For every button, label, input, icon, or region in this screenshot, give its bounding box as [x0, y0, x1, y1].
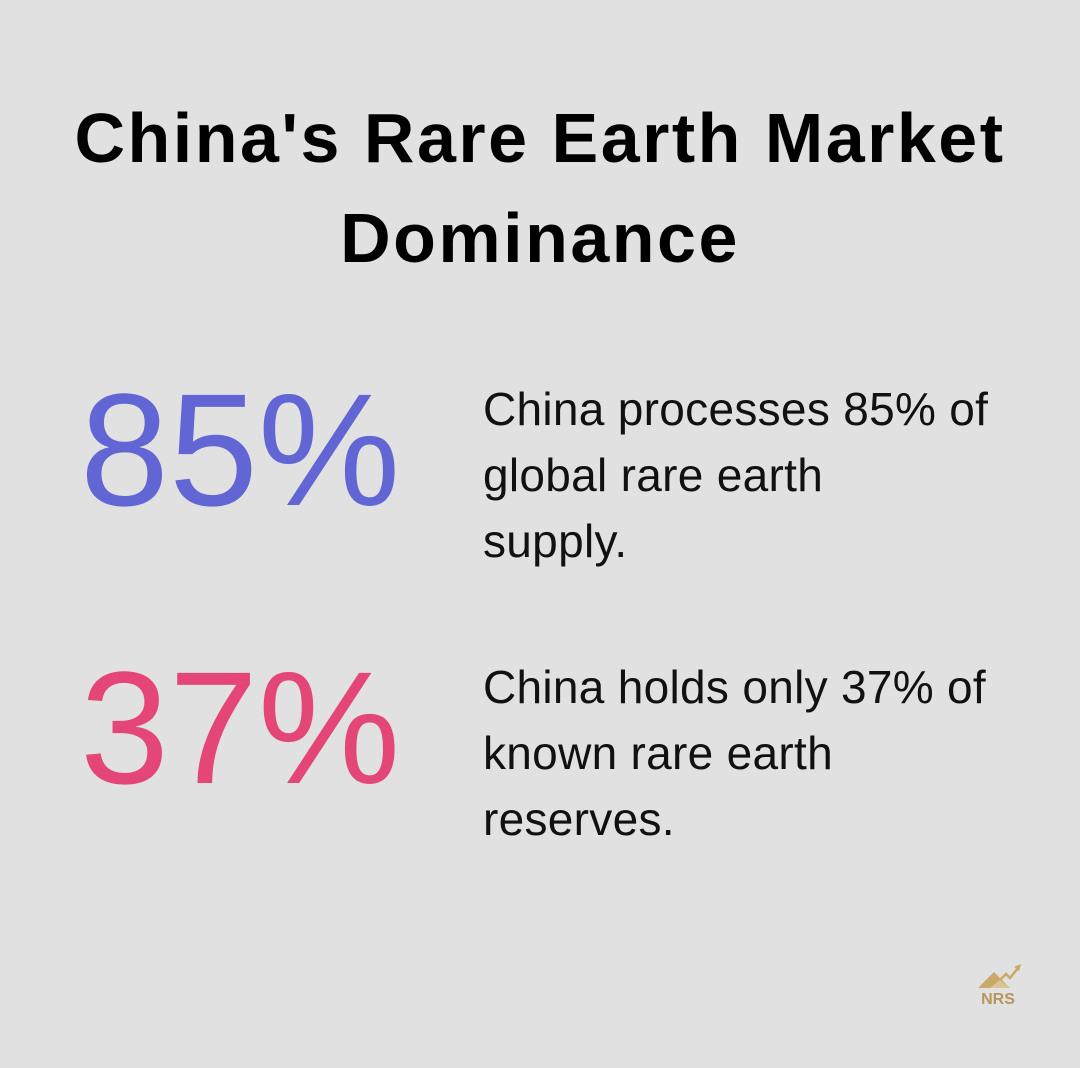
title	[74, 99, 1006, 277]
logo: NRS	[978, 964, 1021, 1006]
stat description: processing: supply.	[483, 515, 627, 567]
stat description: processing: China processes 85% of	[483, 383, 988, 435]
title: Dominance	[340, 199, 740, 277]
stat number: 37%: 37%	[80, 638, 400, 817]
title: China's Rare Earth Market	[74, 99, 1006, 177]
stat description: reserves: reserves.	[483, 793, 675, 845]
stat description: reserves: known rare earth	[483, 727, 833, 779]
stat number: 85%: 85%	[80, 360, 400, 539]
stat description: processing	[483, 383, 988, 567]
stat description: processing: global rare earth	[483, 449, 823, 501]
stat description: reserves: China holds only 37% of	[483, 661, 986, 713]
stat description: reserves	[483, 661, 986, 845]
